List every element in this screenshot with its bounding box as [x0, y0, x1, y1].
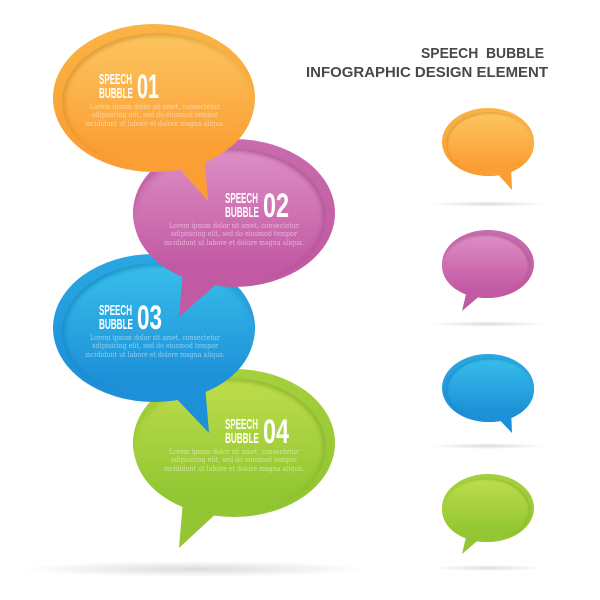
- label: speech bubble 03: BUBBLE: [99, 316, 133, 333]
- ground shadow: small orange bubble: [430, 201, 546, 207]
- body text 02: adipisicing elit, sed do eiusmod tempor: [171, 229, 297, 238]
- label: speech bubble 04: [225, 413, 289, 451]
- body text 02: incididunt ut labore et dolore magna aliqua.: [164, 238, 304, 247]
- small bubble: green: [442, 474, 534, 554]
- label: speech bubble 01: 01: [137, 68, 159, 106]
- label: speech bubble 02: 02: [263, 187, 289, 225]
- label: speech bubble 04: SPEECH: [225, 416, 258, 433]
- body text 01: [85, 102, 225, 128]
- label: speech bubble 01: [99, 68, 159, 106]
- body text 04: incididunt ut labore et dolore magna aliqua.: [164, 464, 304, 473]
- ground shadow: small green bubble: [430, 565, 546, 571]
- label: speech bubble 02: SPEECH: [225, 190, 258, 207]
- label: speech bubble 02: BUBBLE: [225, 204, 259, 221]
- body text 02: [164, 221, 304, 247]
- small bubble: purple: [442, 230, 534, 311]
- ground shadow: large bubbles: [20, 561, 370, 577]
- body text 04: Lorem ipsum dolor sit amet, consectetur: [169, 447, 299, 456]
- body text 03: incididunt ut labore et dolore magna aliqua.: [85, 350, 225, 359]
- body text 04: [164, 447, 304, 473]
- label: speech bubble 03: [99, 299, 162, 337]
- title: [306, 45, 548, 81]
- bubble 03: blue: [53, 254, 255, 433]
- label: speech bubble 03: SPEECH: [99, 302, 132, 319]
- label: speech bubble 01: BUBBLE: [99, 85, 133, 102]
- label: speech bubble 04: BUBBLE: [225, 430, 259, 447]
- label: speech bubble 04: 04: [263, 413, 289, 451]
- body text 03: [85, 333, 225, 359]
- body text 02: Lorem ipsum dolor sit amet, consectetur: [169, 221, 299, 230]
- body text 01: incididunt ut labore et dolore magna aliqua.: [85, 119, 225, 128]
- body text 01: Lorem ipsum dolor sit amet, consectetur: [90, 102, 220, 111]
- body text 04: adipisicing elit, sed do eiusmod tempor: [171, 455, 297, 464]
- ground shadow: small blue bubble: [430, 443, 546, 449]
- bubble 04: green: [133, 369, 335, 548]
- body text 03: adipisicing elit, sed do eiusmod tempor: [92, 341, 218, 350]
- label: speech bubble 01: SPEECH: [99, 71, 132, 88]
- title: INFOGRAPHIC DESIGN ELEMENT: [306, 64, 548, 81]
- title: SPEECH BUBBLE: [421, 45, 544, 62]
- bubble 02: purple: [133, 139, 335, 317]
- body text 01: adipisicing elit, sed do eiusmod tempor: [92, 110, 218, 119]
- small bubble: blue: [442, 354, 534, 433]
- ground shadow: small purple bubble: [430, 321, 546, 327]
- label: speech bubble 02: [225, 187, 289, 225]
- body text 03: Lorem ipsum dolor sit amet, consectetur: [90, 333, 220, 342]
- bubble 01: orange: [53, 24, 255, 201]
- label: speech bubble 03: 03: [137, 299, 162, 337]
- small bubble: orange: [442, 108, 534, 190]
